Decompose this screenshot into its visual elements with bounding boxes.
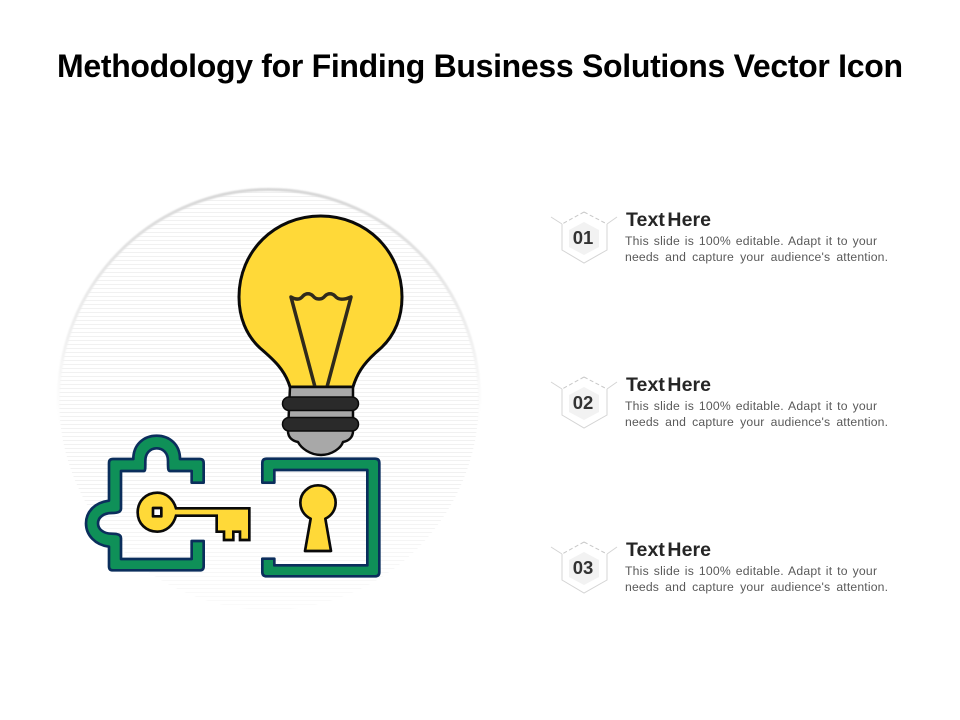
key [138, 493, 249, 540]
text block 03: This slide is 100% editable. Adapt it to your [625, 564, 877, 578]
text block 03: Text Here [626, 539, 711, 561]
filament [291, 294, 351, 387]
hexagon badge 03 [551, 542, 617, 593]
keyhole [300, 485, 336, 551]
text block 01: This slide is 100% editable. Adapt it to your [625, 234, 877, 248]
item 02 [551, 374, 888, 429]
text block 02: This slide is 100% editable. Adapt it to your [625, 399, 877, 413]
text block 02: needs and capture your audience's attention. [625, 415, 888, 429]
text block 03 [625, 539, 888, 594]
text block 02: Text Here [626, 374, 711, 396]
text block 02 [625, 374, 888, 429]
striped background circle [59, 188, 479, 565]
title: Methodology for Finding Business Solutions Vector Icon [57, 48, 903, 84]
puzzle piece right [262, 459, 379, 576]
hexagon badge 01 [551, 212, 617, 263]
hexagon badge 03: 03 [573, 557, 593, 578]
text block 01: Text Here [626, 209, 711, 231]
bulb glass [239, 216, 402, 387]
hexagon badge 01: 01 [573, 227, 593, 248]
base band upper [282, 397, 358, 410]
hexagon badge 02: 02 [573, 392, 593, 413]
hexagon badge 02 [551, 377, 617, 428]
icon: light bulb [239, 216, 402, 455]
screw base [288, 387, 353, 455]
item 01 [551, 209, 888, 264]
icon: puzzle, key and keyhole [86, 436, 379, 576]
item 03 [551, 539, 888, 594]
text block 01 [625, 209, 888, 264]
text block 01: needs and capture your audience's attention. [625, 250, 888, 264]
key hole [153, 508, 161, 516]
puzzle piece left [86, 436, 204, 570]
base band lower [282, 418, 358, 431]
text block 03: needs and capture your audience's attention. [625, 580, 888, 594]
